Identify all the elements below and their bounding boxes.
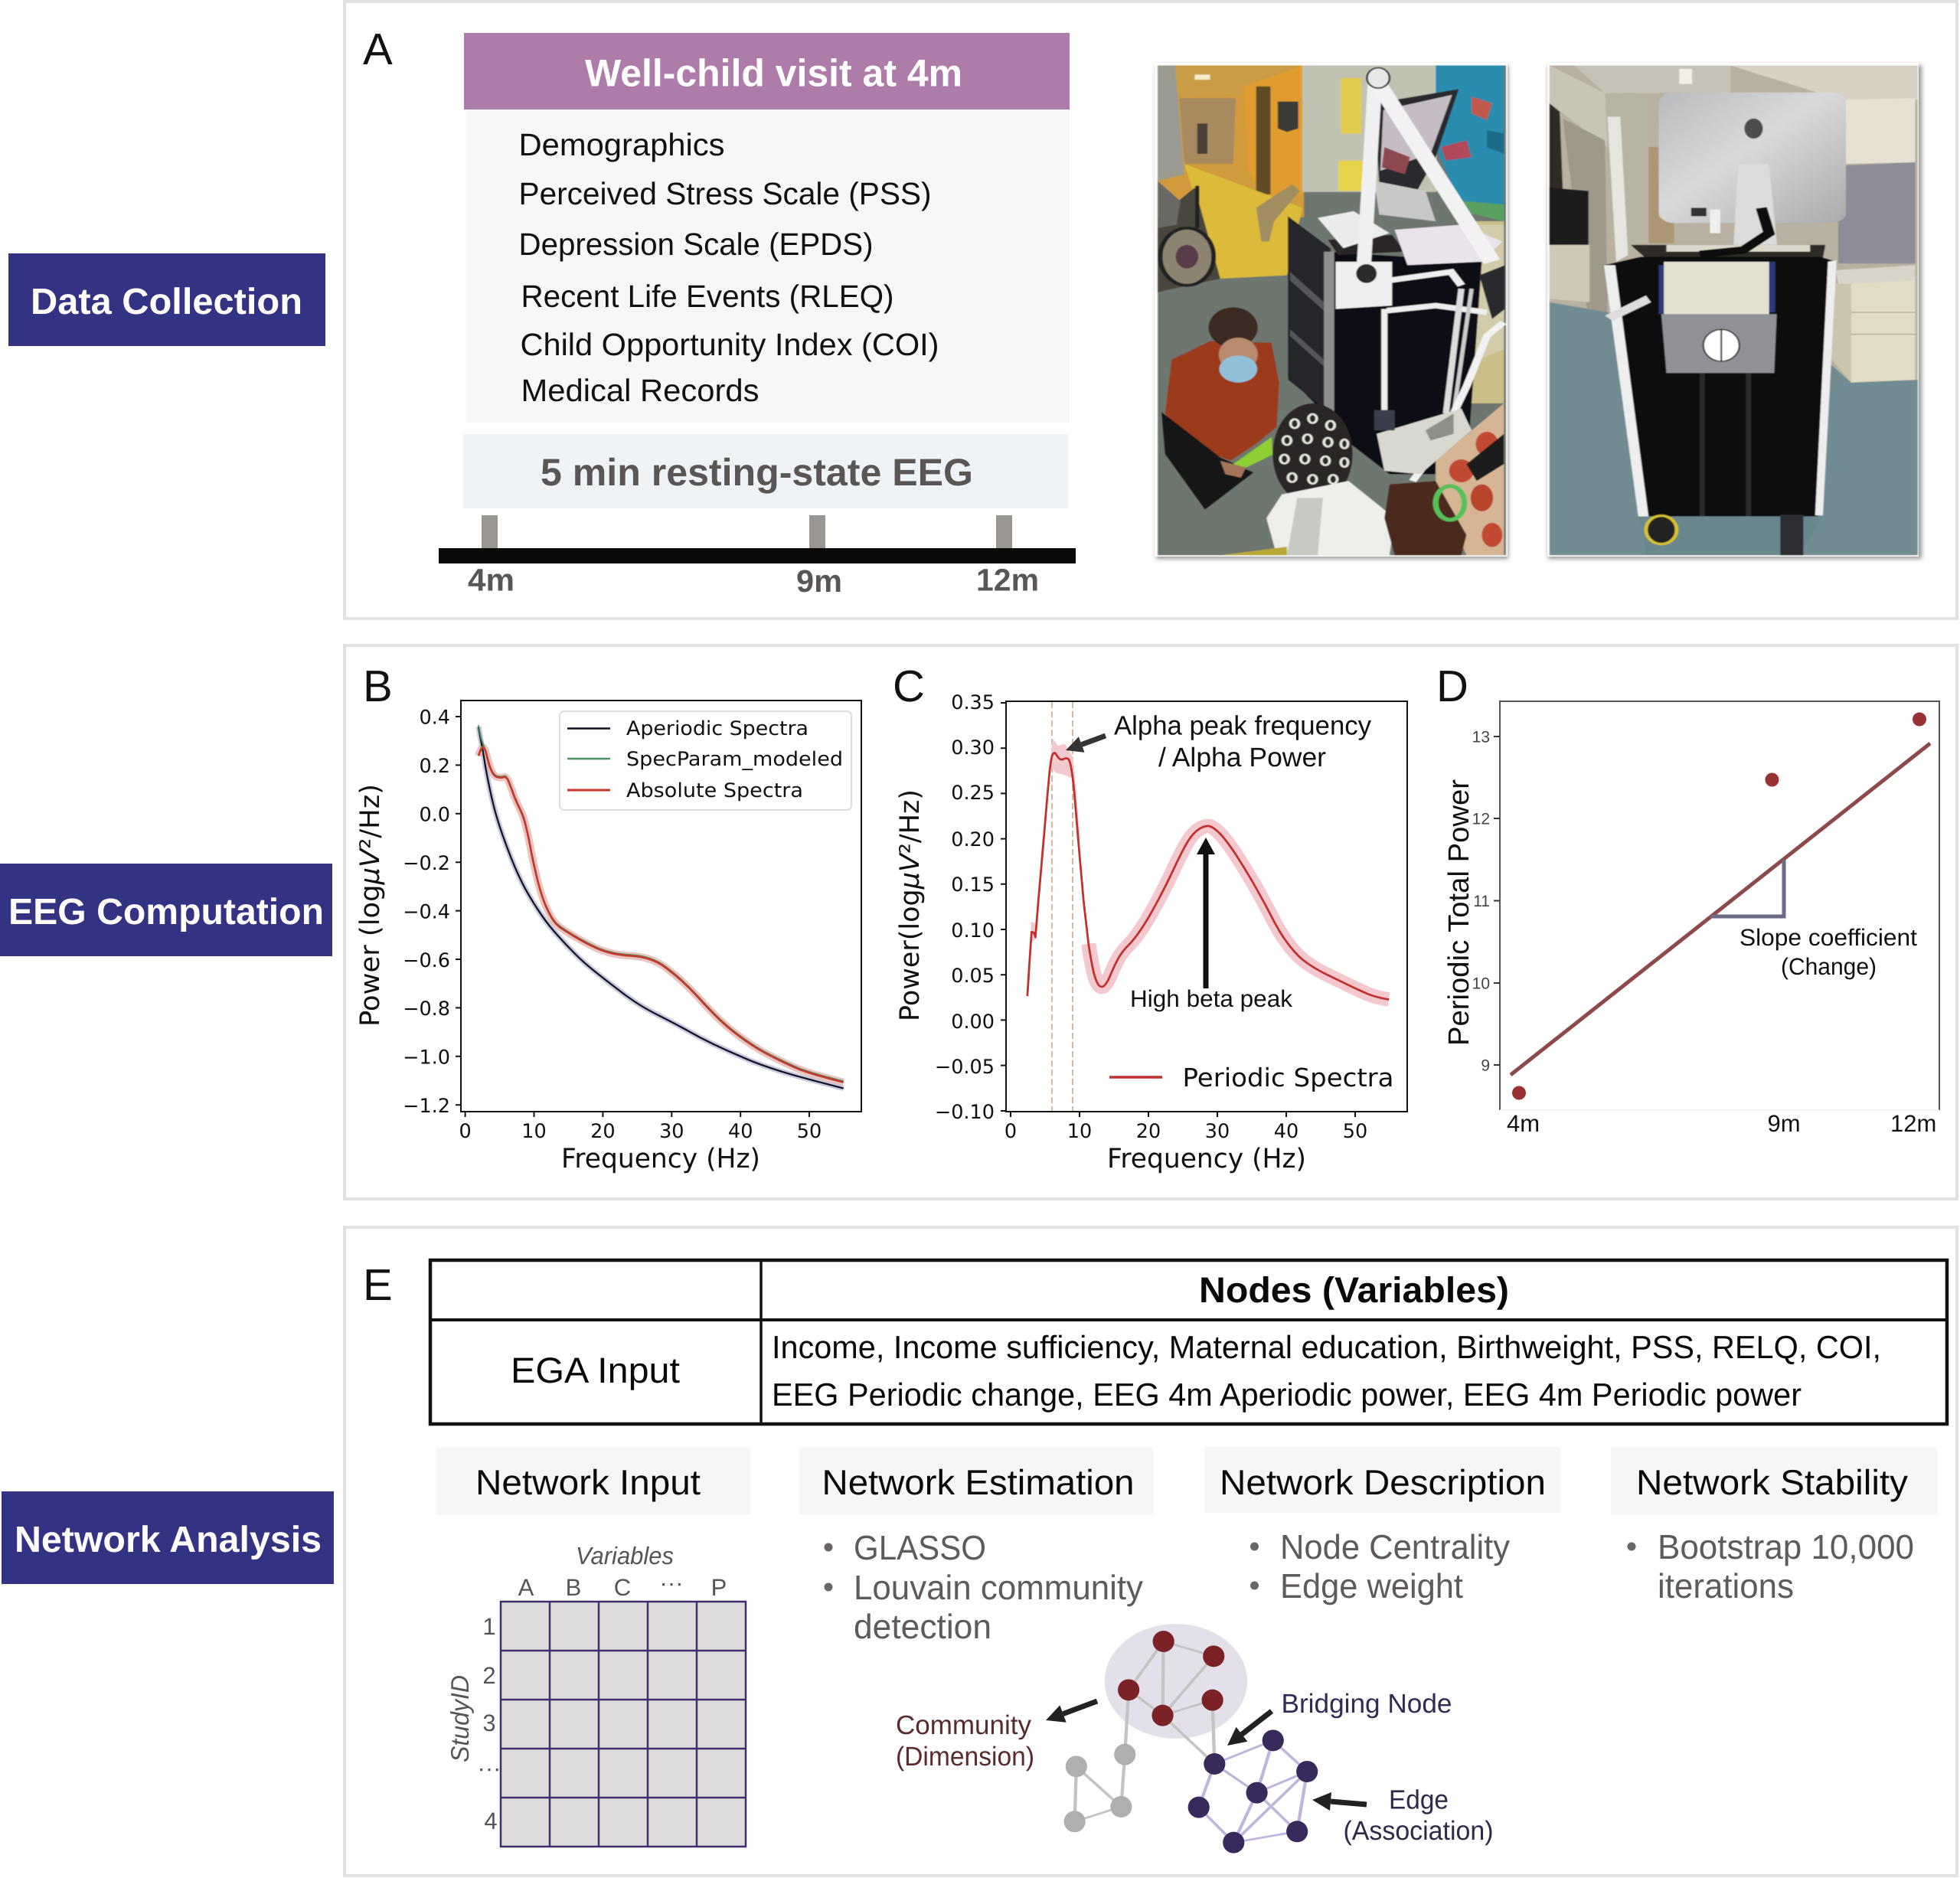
axis title: Frequency (Hz) bbox=[561, 1144, 760, 1174]
ticks: 0 bbox=[1004, 1120, 1017, 1143]
x labels bbox=[1507, 1110, 1936, 1137]
y axis title: Periodic Total Power bbox=[1443, 779, 1475, 1046]
label: community: Community bbox=[896, 1710, 1031, 1740]
matrix row labels: 3 bbox=[482, 1710, 496, 1736]
photo: EEG cart bbox=[1547, 63, 1922, 559]
data matrix bbox=[446, 1542, 746, 1847]
banner: well-child visit bbox=[464, 33, 1070, 109]
matrix row labels: 4 bbox=[484, 1808, 498, 1834]
bullets: network estimation: GLASSO bbox=[854, 1528, 986, 1567]
banner: resting-state EEG: 5 min resting-state EEG bbox=[541, 451, 973, 494]
matrix row labels: 1 bbox=[482, 1613, 496, 1640]
arrow: high beta peak bbox=[1197, 838, 1215, 988]
x ticks: 20 bbox=[590, 1120, 616, 1143]
matrix row labels bbox=[446, 1613, 501, 1834]
arrow: edge bbox=[1312, 1792, 1367, 1811]
bullets: network description: Node Centrality bbox=[1280, 1527, 1510, 1566]
timeline bbox=[439, 515, 1076, 599]
matrix row labels: 2 bbox=[482, 1662, 496, 1689]
list of measures: Child Opportunity Index (COI) bbox=[521, 327, 939, 362]
matrix column labels: C bbox=[614, 1574, 631, 1601]
legend: Periodic Spectra bbox=[1182, 1063, 1393, 1093]
legend: Absolute Spectra bbox=[626, 779, 803, 802]
panel: data collection (A) bbox=[345, 2, 1957, 619]
matrix row labels: StudyID bbox=[446, 1675, 474, 1762]
ticks: 30 bbox=[1205, 1120, 1230, 1143]
x labels: 12m bbox=[1890, 1110, 1936, 1137]
list of measures: Depression Scale (EPDS) bbox=[519, 227, 873, 262]
table: EGA input: Income, Income sufficiency, Maternal education, Birthweight, PSS, RELQ, COI, bbox=[772, 1329, 1881, 1365]
y ticks bbox=[403, 706, 809, 1118]
y ticks: −0.8 bbox=[403, 998, 450, 1021]
label: community bbox=[896, 1710, 1034, 1772]
section label: Network Analysis: Network Analysis bbox=[15, 1520, 322, 1560]
banner: resting-state EEG bbox=[463, 434, 1068, 508]
legend: SpecParam_modeled bbox=[626, 748, 843, 771]
section label: Data Collection: Data Collection bbox=[31, 282, 302, 322]
callout: alpha peak bbox=[1114, 710, 1371, 772]
table: EGA input: EEG Periodic change, EEG 4m Aperiodic power, EEG 4m Periodic power bbox=[772, 1377, 1802, 1413]
ticks: 20 bbox=[1136, 1120, 1161, 1143]
ticks: 10 bbox=[1067, 1120, 1092, 1143]
y ticks: 0.2 bbox=[419, 755, 450, 778]
ticks: 0.20 bbox=[951, 828, 995, 851]
ticks: −0.05 bbox=[935, 1056, 995, 1079]
ticks: 40 bbox=[1274, 1120, 1298, 1143]
callout: alpha peak: Alpha peak frequency bbox=[1114, 710, 1371, 741]
x labels: 4m bbox=[1507, 1110, 1540, 1137]
y ticks: 0.0 bbox=[419, 804, 450, 827]
ticks: 0.05 bbox=[951, 965, 995, 988]
list of measures bbox=[466, 109, 1070, 423]
heading: network description bbox=[1205, 1447, 1560, 1513]
x ticks: 50 bbox=[797, 1120, 822, 1143]
data points bbox=[1512, 712, 1926, 1099]
matrix column labels: A bbox=[518, 1574, 534, 1601]
photo: clinic EEG session bbox=[1155, 63, 1508, 559]
heading: network estimation bbox=[799, 1448, 1153, 1514]
matrix column labels: B bbox=[566, 1574, 581, 1601]
bullets: network stability: iterations bbox=[1658, 1566, 1794, 1605]
bullets: network estimation: Louvain community bbox=[854, 1568, 1143, 1607]
ticks: 50 bbox=[1343, 1120, 1367, 1143]
ticks: 0.35 bbox=[951, 691, 995, 714]
y ticks bbox=[1472, 729, 1500, 1075]
x ticks: 40 bbox=[728, 1120, 753, 1143]
matrix column labels bbox=[518, 1542, 727, 1601]
label: edge: (Association) bbox=[1343, 1816, 1493, 1846]
section label: Data Collection bbox=[8, 253, 325, 346]
heading: network stability bbox=[1611, 1448, 1937, 1514]
panel letter A: A bbox=[363, 24, 393, 74]
y ticks: −1.2 bbox=[403, 1095, 450, 1118]
list of measures: Recent Life Events (RLEQ) bbox=[521, 279, 894, 314]
table: EGA input: EGA Input bbox=[511, 1350, 680, 1390]
list of measures: Medical Records bbox=[521, 373, 760, 408]
heading: network estimation: Network Estimation bbox=[822, 1462, 1135, 1502]
ticks: 0.10 bbox=[951, 919, 995, 942]
ticks: 0.25 bbox=[951, 782, 995, 805]
panel letter B: B bbox=[363, 661, 393, 711]
label: community: (Dimension) bbox=[896, 1742, 1034, 1772]
heading: network description: Network Description bbox=[1220, 1462, 1546, 1502]
x labels: 9m bbox=[1767, 1110, 1801, 1137]
heading: network stability: Network Stability bbox=[1636, 1462, 1908, 1502]
y ticks: −0.2 bbox=[403, 852, 450, 875]
section label: EEG Computation bbox=[0, 864, 332, 956]
label: edge bbox=[1343, 1785, 1493, 1846]
x ticks: 10 bbox=[521, 1120, 547, 1143]
table: EGA input bbox=[430, 1260, 1947, 1424]
bullets: network description: Edge weight bbox=[1280, 1566, 1463, 1605]
heading: network input: Network Input bbox=[475, 1462, 701, 1502]
periodic curve bbox=[1027, 739, 1389, 1000]
y ticks: 11 bbox=[1473, 893, 1490, 910]
ticks bbox=[935, 691, 1367, 1143]
x ticks bbox=[459, 1120, 822, 1143]
ticks: 0.00 bbox=[951, 1011, 995, 1034]
y ticks: 10 bbox=[1472, 975, 1490, 992]
chart D: periodic power slope bbox=[1443, 701, 1939, 1137]
callout: slope coefficient: Slope coefficient bbox=[1740, 924, 1917, 951]
ticks: 0.15 bbox=[951, 874, 995, 897]
axis title: Frequency (Hz) bbox=[1107, 1144, 1306, 1174]
timeline: 4m bbox=[468, 562, 514, 597]
y ticks: −0.4 bbox=[403, 900, 450, 923]
bullets: network estimation bbox=[824, 1528, 1143, 1646]
panel: network analysis bbox=[345, 1227, 1957, 1876]
chart B: absolute and aperiodic spectra bbox=[355, 701, 861, 1174]
section label: Network Analysis bbox=[2, 1491, 334, 1584]
arrow: bridging node bbox=[1227, 1711, 1272, 1746]
x ticks: 0 bbox=[459, 1120, 472, 1143]
y axis title: Power (logμV²/Hz) bbox=[355, 784, 386, 1027]
callout: high beta peak: High beta peak bbox=[1130, 985, 1292, 1012]
y ticks: 0.4 bbox=[419, 706, 450, 729]
callout: slope coefficient bbox=[1740, 924, 1917, 980]
timeline: 12m bbox=[976, 562, 1039, 597]
arrow: alpha peak bbox=[1066, 736, 1106, 753]
timeline: 9m bbox=[796, 563, 842, 599]
panel letter C: C bbox=[893, 661, 925, 711]
spectra curves bbox=[479, 725, 844, 1089]
slope triangle bbox=[1711, 860, 1784, 916]
x ticks: 30 bbox=[659, 1120, 684, 1143]
matrix column labels: P bbox=[711, 1574, 727, 1601]
panel letter E: E bbox=[363, 1260, 393, 1310]
matrix column labels: ··· bbox=[660, 1569, 683, 1596]
fit line bbox=[1511, 743, 1930, 1075]
network diagram bbox=[896, 1624, 1493, 1854]
ticks: 0.30 bbox=[951, 737, 995, 759]
list of measures: Perceived Stress Scale (PSS) bbox=[519, 176, 931, 211]
legend bbox=[560, 711, 851, 810]
y axis title: Power(logμV²/Hz) bbox=[895, 789, 926, 1021]
callout: alpha peak: / Alpha Power bbox=[1158, 743, 1326, 772]
callout: slope coefficient: (Change) bbox=[1781, 953, 1877, 980]
label: edge: Edge bbox=[1389, 1785, 1449, 1814]
bullets: network stability bbox=[1628, 1527, 1914, 1605]
matrix row labels: ··· bbox=[478, 1755, 501, 1782]
table: EGA input: Nodes (Variables) bbox=[1199, 1269, 1509, 1310]
legend: Aperiodic Spectra bbox=[626, 717, 808, 740]
bullets: network estimation: detection bbox=[854, 1607, 991, 1646]
bullets: network stability: Bootstrap 10,000 bbox=[1658, 1527, 1914, 1566]
y ticks: 12 bbox=[1472, 810, 1490, 828]
banner: well-child visit: Well-child visit at 4m bbox=[585, 52, 962, 95]
bullets: network description bbox=[1250, 1527, 1510, 1605]
list of measures: Demographics bbox=[519, 127, 724, 162]
y ticks: −1.0 bbox=[403, 1046, 450, 1069]
panel letter D: D bbox=[1436, 661, 1468, 711]
y ticks: 9 bbox=[1481, 1057, 1490, 1075]
matrix column labels: Variables bbox=[576, 1542, 674, 1569]
alpha band markers bbox=[1052, 702, 1073, 1111]
panel: EEG computation bbox=[345, 645, 1957, 1199]
arrow: community bbox=[1046, 1701, 1097, 1723]
y ticks: 13 bbox=[1472, 729, 1490, 746]
heading: network input bbox=[436, 1448, 750, 1514]
ticks: −0.10 bbox=[935, 1101, 995, 1124]
chart C: periodic spectra bbox=[895, 691, 1407, 1174]
section label: EEG Computation: EEG Computation bbox=[8, 892, 324, 932]
y ticks: −0.6 bbox=[403, 949, 450, 972]
label: bridging node: Bridging Node bbox=[1282, 1689, 1452, 1719]
